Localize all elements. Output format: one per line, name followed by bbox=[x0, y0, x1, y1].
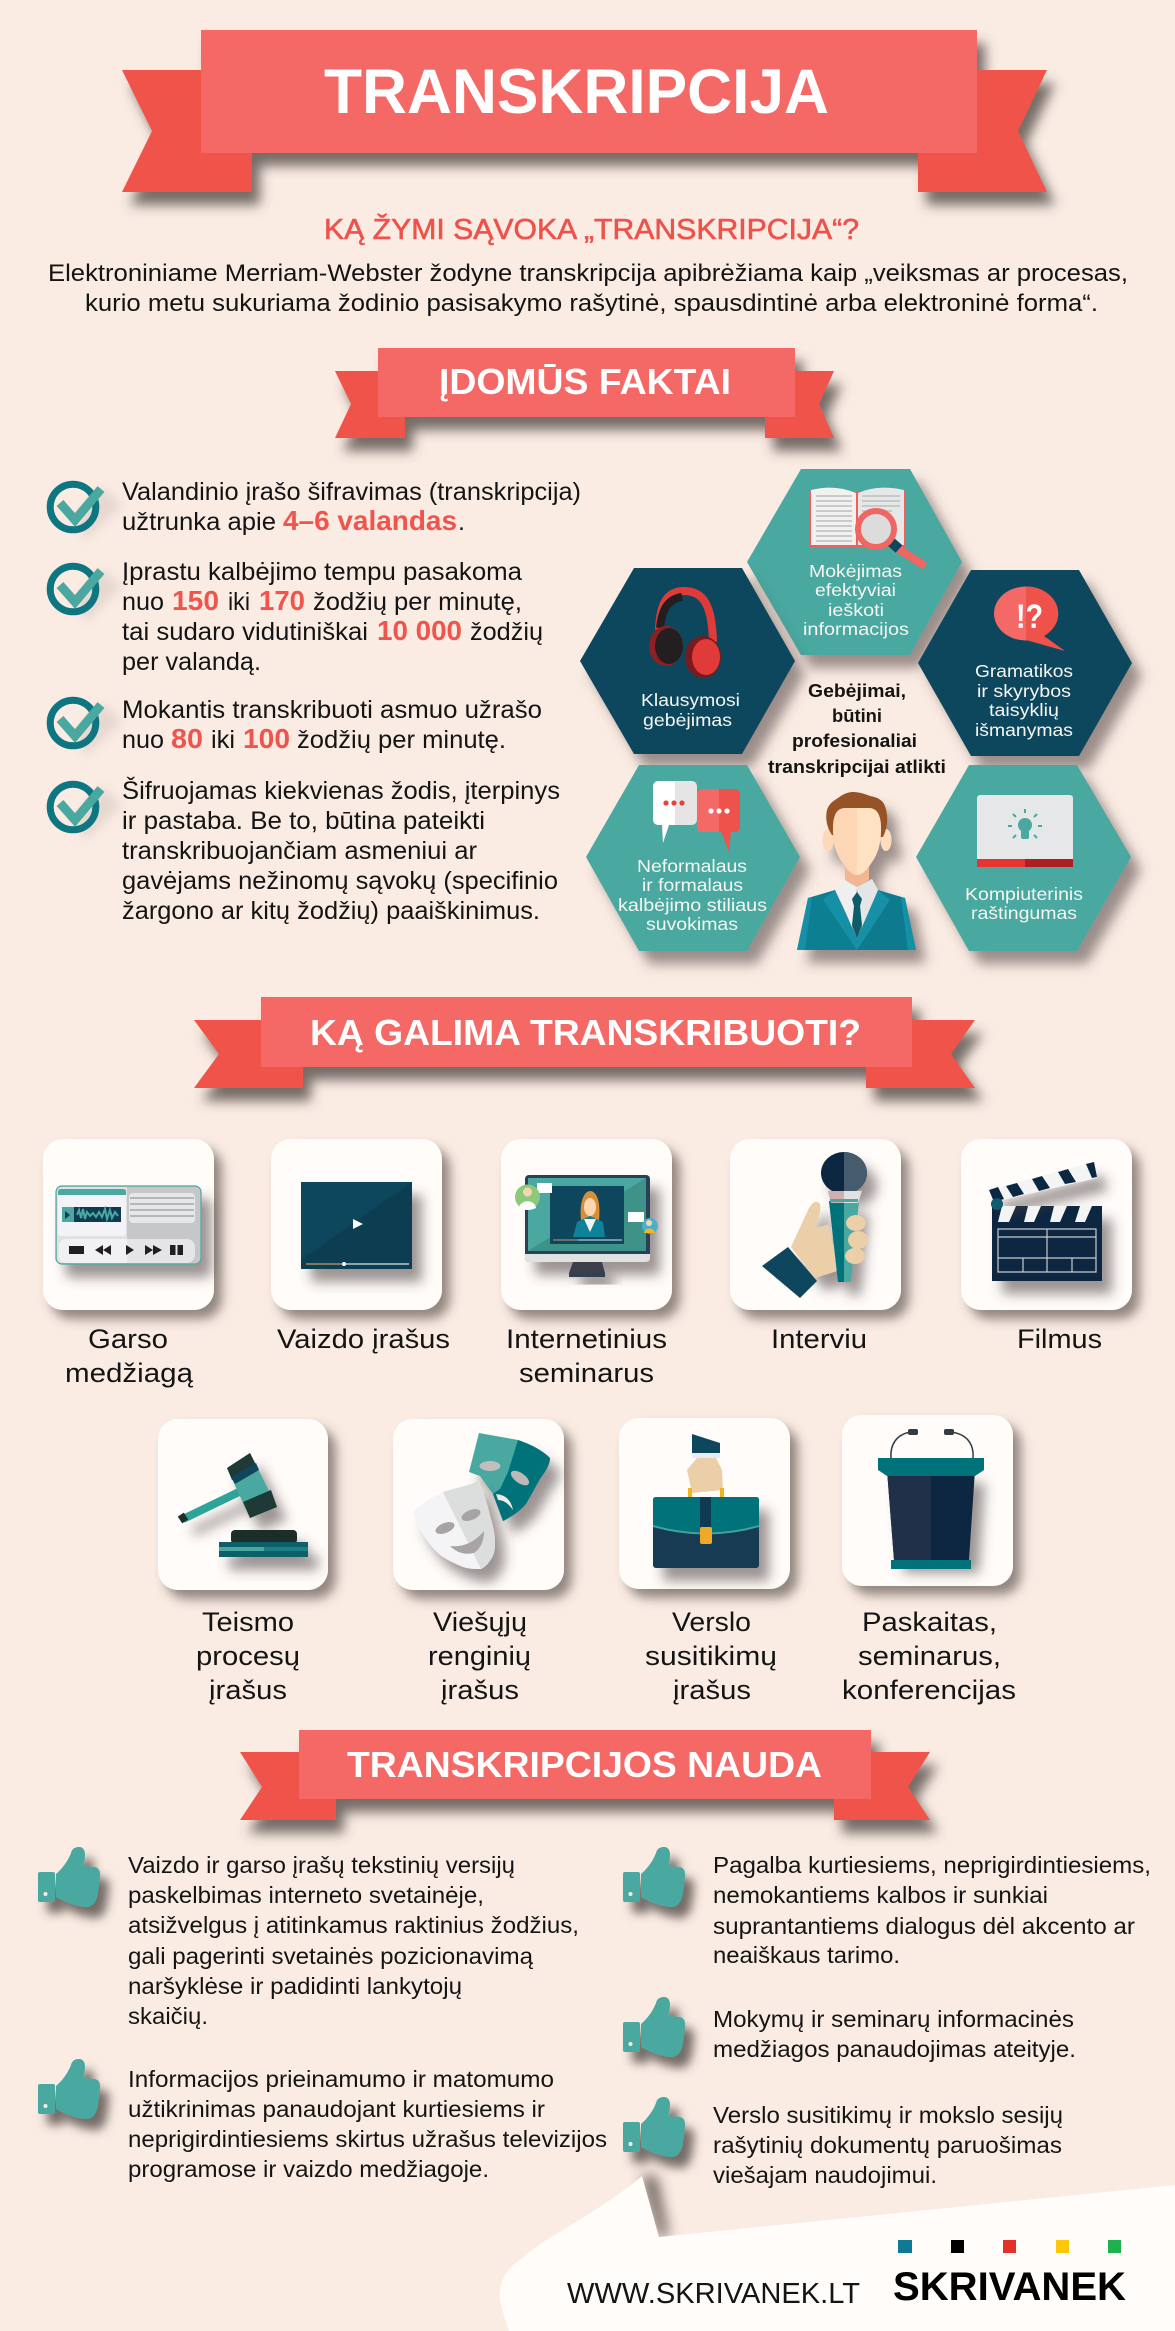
fact 1: Valandinio įrašo šifravimas (transkripcija) bbox=[122, 478, 581, 506]
definition text: kurio metu sukuriama žodinio pasisakymo rašytinė, spausdintinė arba elektroninė forma“. bbox=[85, 290, 1098, 317]
panel: facts list bbox=[50, 478, 581, 925]
hexagon: grammar bbox=[918, 570, 1132, 756]
benefit text 2: užtikrinimas panaudojant kurtiesiems ir bbox=[128, 2096, 545, 2122]
label: susitikimų bbox=[645, 1641, 777, 1671]
label: Viešųjų bbox=[433, 1607, 527, 1637]
benefit text 4: medžiagos panaudojimas ateityje. bbox=[713, 2036, 1076, 2062]
centre caption: Gebėjimai, bbox=[808, 681, 906, 701]
icon: thumb up 1 bbox=[38, 1847, 100, 1907]
fact 4: gavėjams nežinomų sąvokų (specifinio bbox=[122, 867, 558, 895]
fact 2: 150 bbox=[172, 585, 219, 616]
card: court bbox=[158, 1419, 328, 1705]
label bbox=[196, 1607, 300, 1705]
benefit text 5: rašytinių dokumentų paruošimas bbox=[713, 2132, 1062, 2158]
fact 3 bbox=[122, 696, 542, 754]
fact 2: tai sudaro vidutiniškai bbox=[122, 618, 368, 646]
benefit text 1: Vaizdo ir garso įrašų tekstinių versijų bbox=[128, 1852, 515, 1878]
label: įrašus bbox=[673, 1675, 751, 1705]
fact 3: nuo bbox=[122, 726, 164, 754]
icon: podium bbox=[878, 1429, 984, 1569]
centre caption bbox=[768, 681, 946, 777]
benefit text 1: skaičių. bbox=[128, 2003, 208, 2029]
icon: check 1 bbox=[50, 484, 122, 540]
icon: briefcase bbox=[653, 1434, 759, 1568]
definition text bbox=[48, 260, 1128, 317]
label: Vaizdo įrašus bbox=[277, 1324, 450, 1354]
logo: Skrivanek: SKRIVANEK bbox=[893, 2265, 1126, 2309]
card: webinars bbox=[501, 1139, 672, 1388]
icon: thumb up 3 bbox=[623, 1847, 685, 1907]
fact 4 bbox=[122, 776, 560, 925]
website address: WWW.SKRIVANEK.LT bbox=[567, 2278, 860, 2310]
panel: skills hexagons bbox=[580, 469, 1132, 951]
fact 3: žodžių per minutę. bbox=[297, 726, 506, 754]
benefit text 3: nemokantiems kalbos ir sunkiai bbox=[713, 1882, 1048, 1908]
icon: check 2 bbox=[50, 566, 122, 622]
hexagon: speech styles: ir formalaus bbox=[642, 875, 743, 895]
fact 4: ir pastaba. Be to, būtina pateikti bbox=[122, 807, 485, 835]
label: seminarus, bbox=[858, 1641, 1001, 1671]
benefit text 2 bbox=[128, 2066, 607, 2182]
benefit text 1: gali pagerinti svetainės pozicionavimą bbox=[128, 1943, 533, 1969]
label: Teismo bbox=[202, 1607, 294, 1637]
hexagon: grammar: Gramatikos bbox=[975, 661, 1073, 681]
card: business meetings bbox=[619, 1418, 790, 1705]
fact 4: transkribuojančiam asmeniui ar bbox=[122, 837, 477, 865]
hexagon: listening bbox=[580, 568, 795, 754]
fact 2: nuo bbox=[122, 588, 164, 616]
hexagon: speech styles: Neformalaus bbox=[637, 856, 747, 876]
icon: monitor with presenter bbox=[515, 1175, 658, 1277]
hexagon: grammar: ir skyrybos bbox=[977, 681, 1071, 701]
hexagon: search skill: ieškoti bbox=[828, 600, 884, 620]
label bbox=[65, 1324, 194, 1388]
hexagon: search skill: informacijos bbox=[803, 619, 909, 639]
benefit text 3: neaiškaus tarimo. bbox=[713, 1942, 900, 1968]
definition text: Elektroniniame Merriam-Webster žodyne transkripcija apibrėžiama kaip „veiksmas ar procesas, bbox=[48, 260, 1128, 287]
icon: thumb up 2 bbox=[38, 2059, 100, 2119]
benefit text 5 bbox=[713, 2102, 1063, 2188]
icon: professional person bbox=[797, 792, 916, 950]
icon: thumb up 4 bbox=[623, 1997, 685, 2057]
centre caption: būtini bbox=[832, 706, 882, 726]
fact 2: iki bbox=[228, 588, 250, 616]
label bbox=[645, 1607, 777, 1705]
benefit text 2: neprigirdintiesiems skirtus užrašus televizijos bbox=[128, 2126, 607, 2152]
label: seminarus bbox=[519, 1358, 654, 1388]
banner: title: TRANSKRIPCIJA bbox=[324, 57, 829, 127]
label: Paskaitas, bbox=[862, 1607, 997, 1637]
hexagon: computer literacy bbox=[916, 765, 1131, 951]
card: public events bbox=[393, 1419, 564, 1705]
fact 3: 80 bbox=[171, 723, 203, 754]
label: Filmus bbox=[1017, 1324, 1102, 1354]
fact 2: 170 bbox=[259, 585, 305, 616]
benefit text 1 bbox=[128, 1852, 579, 2029]
benefit text 1: atsižvelgus į atitinkamus raktinius žodžius, bbox=[128, 1912, 579, 1938]
icon: clapperboard bbox=[989, 1162, 1102, 1281]
fact 3: iki bbox=[211, 726, 235, 754]
benefit text 5: viešajam naudojimui. bbox=[713, 2162, 937, 2188]
banner: benefits: TRANSKRIPCIJOS NAUDA bbox=[347, 1744, 822, 1785]
icon: video screen bbox=[301, 1182, 412, 1269]
benefit text 2: Informacijos prieinamumo ir matomumo bbox=[128, 2066, 554, 2092]
benefit text 1: paskelbimas interneto svetainėje, bbox=[128, 1882, 484, 1908]
fact 2: 10 000 bbox=[377, 615, 462, 646]
benefit text 3: suprantantiems dialogus dėl akcento ar bbox=[713, 1913, 1135, 1939]
label bbox=[506, 1324, 667, 1388]
fact 3: Mokantis transkribuoti asmuo užrašo bbox=[122, 696, 542, 724]
fact 2 bbox=[122, 558, 543, 676]
label: įrašus bbox=[441, 1675, 519, 1705]
label: procesų bbox=[196, 1641, 300, 1671]
fact 1: 4–6 valandas bbox=[283, 505, 457, 536]
hexagon: grammar: išmanymas bbox=[975, 720, 1073, 740]
icon: audio player bbox=[56, 1186, 201, 1264]
fact 4: Šifruojamas kiekvienas žodis, įterpinys bbox=[122, 776, 560, 805]
fact 1 bbox=[122, 478, 581, 536]
label bbox=[842, 1607, 1016, 1705]
hexagon: computer literacy: Kompiuterinis bbox=[965, 884, 1083, 904]
benefit text 3: Pagalba kurtiesiems, neprigirdintiesiems, bbox=[713, 1852, 1151, 1878]
subheading: definition: KĄ ŽYMI SĄVOKA „TRANSKRIPCIJA“? bbox=[324, 213, 859, 246]
card: interviews bbox=[730, 1139, 901, 1354]
fact 4: žargono ar kitų žodžių) paaiškinimus. bbox=[122, 897, 540, 925]
panel: benefits right bbox=[623, 1847, 1151, 2188]
icon: hand with microphone bbox=[762, 1152, 868, 1298]
label: Internetinius bbox=[506, 1324, 667, 1354]
icon: speech bubble: !? bbox=[1016, 598, 1043, 636]
banner: title bbox=[122, 30, 1047, 192]
label bbox=[428, 1607, 531, 1705]
centre caption: profesionaliai bbox=[792, 731, 917, 751]
benefit text 4: Mokymų ir seminarų informacinės bbox=[713, 2006, 1074, 2032]
footer speech shape bbox=[500, 2176, 1175, 2331]
icon: headphones bbox=[649, 591, 721, 678]
benefit text 2: programose ir vaizdo medžiagoje. bbox=[128, 2156, 489, 2182]
hexagon: search skill: efektyviai bbox=[815, 580, 896, 600]
label: Garso bbox=[88, 1324, 168, 1354]
banner: facts bbox=[335, 348, 834, 438]
fact 2: Įprastu kalbėjimo tempu pasakoma bbox=[122, 558, 522, 586]
card: audio bbox=[43, 1139, 214, 1388]
hexagon: listening: gebėjimas bbox=[643, 710, 732, 730]
label: medžiagą bbox=[65, 1358, 194, 1388]
label: konferencijas bbox=[842, 1675, 1016, 1705]
icon: gavel bbox=[180, 1453, 308, 1557]
fact 2: žodžių per minutę, bbox=[313, 588, 522, 616]
card: lectures bbox=[842, 1415, 1016, 1705]
icon: book and magnifier bbox=[809, 488, 925, 566]
label: Interviu bbox=[771, 1324, 867, 1354]
logo: Skrivanek bbox=[893, 2240, 1126, 2309]
icon: theatre masks bbox=[413, 1433, 550, 1569]
centre caption: transkripcijai atlikti bbox=[768, 757, 946, 777]
benefit text 3 bbox=[713, 1852, 1151, 1968]
banner: facts: ĮDOMŪS FAKTAI bbox=[439, 361, 731, 402]
card: films bbox=[961, 1139, 1132, 1354]
banner: benefits bbox=[240, 1730, 930, 1820]
icon: speech bubble bbox=[994, 586, 1065, 651]
hexagon: computer literacy: raštingumas bbox=[971, 903, 1077, 923]
icon: check 3 bbox=[50, 700, 122, 756]
icon: check 4 bbox=[50, 784, 122, 840]
icon: chat bubbles bbox=[653, 781, 740, 851]
fact 1: užtrunka apie bbox=[122, 508, 276, 536]
hexagon: search skill: Mokėjimas bbox=[809, 561, 902, 581]
benefit text 1: naršyklėse ir padidinti lankytojų bbox=[128, 1973, 462, 1999]
fact 2: per valandą. bbox=[122, 648, 261, 676]
hexagon: speech styles: suvokimas bbox=[646, 914, 738, 934]
banner: what can be transcribed: KĄ GALIMA TRANSKRIBUOTI? bbox=[310, 1012, 861, 1053]
icon: thumb up 5 bbox=[623, 2097, 685, 2157]
hexagon: speech styles: kalbėjimo stiliaus bbox=[618, 895, 767, 915]
hexagon: listening: Klausymosi bbox=[641, 690, 740, 710]
label: įrašus bbox=[209, 1675, 287, 1705]
label: Verslo bbox=[672, 1607, 751, 1637]
fact 1: . bbox=[458, 508, 465, 536]
fact 2: žodžių bbox=[470, 618, 543, 646]
hexagon: speech styles bbox=[586, 765, 800, 951]
icon: laptop with bulb bbox=[977, 795, 1073, 867]
card: video bbox=[271, 1139, 450, 1354]
benefit text 5: Verslo susitikimų ir mokslo sesijų bbox=[713, 2102, 1063, 2128]
hexagon: grammar: taisyklių bbox=[989, 700, 1059, 720]
panel: benefits left bbox=[38, 1847, 607, 2182]
benefit text 4 bbox=[713, 2006, 1076, 2062]
fact 3: 100 bbox=[243, 723, 290, 754]
hexagon: search skill bbox=[747, 469, 962, 655]
label: renginių bbox=[428, 1641, 531, 1671]
banner: what can be transcribed bbox=[194, 997, 975, 1088]
